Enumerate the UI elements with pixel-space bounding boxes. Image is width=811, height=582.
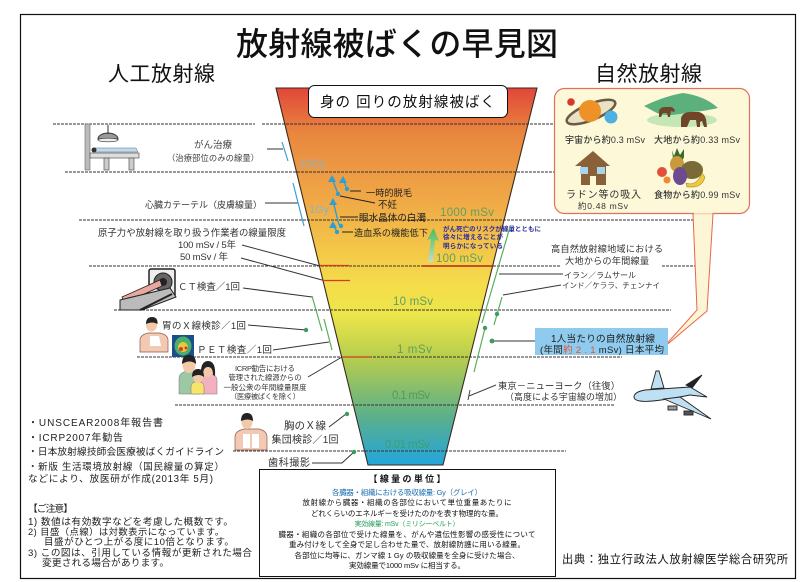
label: occupational dose limits [98, 227, 322, 280]
label: chest X-ray [272, 412, 349, 446]
panel: dose units [260, 470, 556, 576]
label: occupational dose limits: 原子力や放射線を取り扱う作業者の線量限度 [98, 227, 286, 238]
text block: notes: 1) 数値は有効数字などを考慮した概数です。 [28, 515, 233, 528]
text block: references: ・ICRP2007年勧告 [28, 431, 123, 444]
icon: house [575, 151, 610, 185]
label: radon [566, 188, 641, 211]
risk note: がん死亡のリスクが線量とともに [443, 224, 541, 233]
risk note: 徐々に増えることが [443, 232, 504, 241]
icon: airplane [634, 371, 711, 419]
text block: references [28, 416, 224, 485]
text block: references: ・日本放射線技師会医療被ばくガイドライン [28, 445, 224, 458]
text block: notes: 【ご注意】 [28, 502, 73, 515]
text block: notes: 3) この図は、引用している情報が更新された場合 [28, 547, 252, 559]
text block: references: ・新版 生活環境放射線（国民線量の算定） [28, 461, 224, 473]
label: Tokyo-New York flight [468, 380, 622, 402]
text block: notes [28, 502, 252, 569]
label: cancer treatment: がん治療 [194, 139, 232, 151]
panel: dose units: 放射線から臓器・組織の各部位において単位重量あたりに [302, 497, 512, 507]
label: CT exam: ＣＴ検査／1回 [178, 281, 240, 293]
heading: artificial radiation: 人工放射線 [108, 63, 215, 86]
heading: natural radiation: 自然放射線 [595, 63, 702, 86]
risk note: 明らかになっている [443, 241, 503, 250]
deterministic effects arrows and labels: 不妊 [378, 199, 397, 211]
label: Tokyo-New York flight: （高度による宇宙線の増加） [505, 391, 622, 402]
icon: stomach X-ray person [140, 317, 168, 352]
icon: chest X-ray person [235, 413, 267, 450]
risk note [443, 224, 541, 250]
icon: CT scanner [120, 269, 176, 310]
label: ICRP public dose limit: （医療被ばくを除く） [230, 392, 300, 401]
label: chest X-ray: 胸のＸ線 [284, 419, 326, 432]
green range ticks, natural radiation [474, 227, 510, 372]
label: cancer treatment: （治療部位のみの線量） [167, 153, 259, 163]
panel: dose units: 重み付けをして全身で足し合わせた量で、放射線防護に用いる線量。 [289, 539, 525, 549]
scale labels in funnel: 1000 mSv [440, 207, 494, 219]
label: dental X-ray [268, 450, 356, 469]
label: dental X-ray: 歯科撮影 [268, 456, 310, 469]
text block: notes: 目盛がひとつ上がる度に10倍となります。 [44, 536, 234, 548]
dashed scale lines [53, 124, 695, 451]
icon: PET brain scan [172, 335, 194, 357]
label: occupational dose limits: 50 mSv / 年 [180, 251, 228, 263]
source credit: 出典：独立行政法人放射線医学総合研究所 [562, 552, 788, 566]
icon: family [179, 355, 217, 394]
icon: planets [564, 95, 618, 129]
title: 放射線被ばくの早見図 [236, 26, 558, 62]
panel: dose units: どれくらいのエネルギーを受けたのかを表す物理的な量。 [311, 508, 503, 518]
label: stomach X-ray [162, 320, 308, 332]
text block: references: ・UNSCEAR2008年報告書 [28, 416, 163, 429]
label: radon: ラドン等の吸入 [566, 188, 641, 201]
scale labels in funnel: 10Gy [299, 158, 326, 170]
scale labels in funnel: 10 mSv [393, 296, 433, 308]
label: ICRP public dose limit: ICRP勧告における [235, 363, 295, 373]
label: high natural background areas: イラン／ラムサール [564, 271, 636, 280]
scale labels in funnel: 1Gy [309, 204, 330, 216]
text block: references: などにより、放医研が作成(2013年 5月) [28, 472, 213, 485]
text block: notes: 2) 目盛（点線）は対数表示になっています。 [28, 526, 224, 537]
scale labels in funnel [299, 158, 494, 451]
deterministic effects arrows and labels: 造血系の機能低下 [354, 227, 428, 238]
icon: horses on land [644, 93, 718, 127]
red limit markers [320, 266, 494, 357]
callout: average natural dose [490, 328, 668, 356]
icon: radiotherapy patient [85, 124, 139, 170]
panel: natural radiation callout [554, 88, 750, 348]
panel: dose units: 実効線量: mSv（ミリシーベルト） [354, 519, 460, 528]
callout: average natural dose: 1人当たりの自然放射線 [551, 332, 655, 345]
text block: notes: 変更される場合があります。 [42, 556, 169, 569]
label: from ground: 大地から約0.33 mSv [654, 134, 740, 145]
label: high natural background areas: インド／ケララ、チェンナイ [562, 281, 660, 290]
label: chest X-ray: 集団検診／1回 [272, 433, 338, 446]
label: high natural background areas: 高自然放射線地域における [551, 243, 663, 254]
panel: dose units: 各臓器・組織における吸収線量: Gy（グレイ） [332, 487, 482, 497]
scale labels in funnel: 0.1 mSv [392, 390, 430, 402]
label: occupational dose limits: 100 mSv / 5年 [178, 239, 236, 251]
label: stomach X-ray: 胃のＸ線検診／1回 [162, 320, 246, 332]
icon: fruit [657, 148, 705, 187]
label: cardiac catheter [145, 183, 304, 226]
label: ICRP public dose limit [224, 357, 342, 401]
label: high natural background areas [499, 243, 663, 295]
panel: dose units: 各部位に均等に、ガンマ線 1 Gy の吸収線量を全身に受けた場合、 [294, 550, 520, 560]
scale labels in funnel: 100 mSv [436, 253, 483, 265]
panel: funnel heading box [308, 86, 508, 118]
panel: dose units: 実効線量で1000 mSv に相当する。 [349, 560, 465, 570]
panel: dose units: 【 線 量 の 単 位 】 [368, 473, 446, 484]
callout: average natural dose: (年間約 2 . 1 mSv) 日本平均 [540, 344, 664, 356]
label: ICRP public dose limit: 一般公衆の年間線量限度 [224, 383, 307, 392]
label: Tokyo-New York flight: 東京－ニューヨーク（往復） [498, 380, 620, 391]
label: from space: 宇宙から約0.3 mSv [565, 134, 646, 145]
green rising-risk arrow [427, 228, 439, 262]
label: CT exam [178, 281, 332, 350]
label: radon: 約0.48 mSv [578, 201, 629, 211]
scale labels in funnel: 1 mSv [397, 344, 432, 356]
scale labels in funnel: 0.01 mSv [385, 439, 430, 451]
panel: dose units: 臓器・組織の各部位で受けた線量を、がんや遺伝性影響の感受性について [278, 529, 536, 539]
funnel dose scale [276, 88, 537, 465]
label: ICRP public dose limit: 管理された線源からの [228, 373, 302, 382]
deterministic effects arrows and labels: 一時的脱毛 [366, 187, 412, 198]
deterministic effects arrows and labels: 眼水晶体の白濁 [359, 212, 426, 224]
label: cardiac catheter: 心臓カテーテル（皮膚線量） [145, 199, 262, 210]
panel: funnel heading box: 身の 回りの放射線被ばく [320, 94, 495, 111]
label: high natural background areas: 大地からの年間線量 [565, 255, 649, 266]
label: from food: 食物から約0.99 mSv [654, 189, 740, 200]
label: PET exam [197, 342, 329, 356]
deterministic effects arrows and labels [328, 175, 428, 238]
label: PET exam: ＰＥＴ検査／1回 [197, 344, 272, 356]
label: cancer treatment [167, 139, 288, 163]
